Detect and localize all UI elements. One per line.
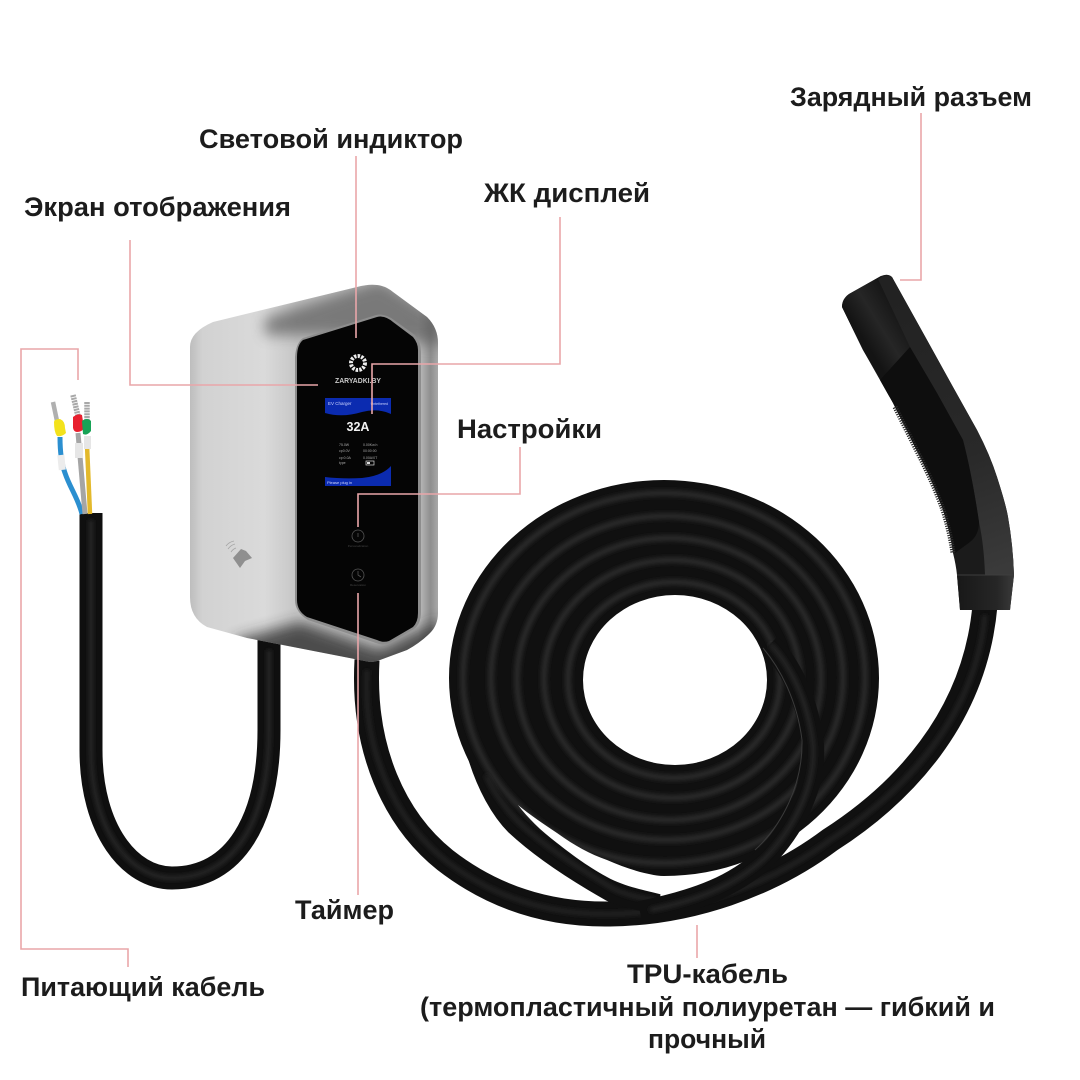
screen: 75.0W bbox=[339, 443, 350, 447]
settings button: Personalization bbox=[348, 544, 369, 548]
label: display screen: Экран отображения bbox=[24, 192, 291, 222]
nfc icon bbox=[226, 541, 252, 568]
screen: type bbox=[339, 461, 346, 465]
label: light indicator: Световой индиктор bbox=[199, 124, 463, 154]
unit body bbox=[185, 280, 445, 680]
wall unit bbox=[185, 280, 445, 680]
leader lines bbox=[21, 113, 921, 967]
screen: 0.00A/0T bbox=[363, 456, 378, 460]
label: TPU cable bbox=[420, 959, 995, 1054]
screen: Please plug in bbox=[327, 480, 352, 485]
label: LCD display: ЖК дисплей bbox=[483, 178, 650, 208]
screen: cp0.0V bbox=[339, 449, 351, 453]
screen bbox=[325, 398, 391, 486]
crossing strand bbox=[640, 644, 813, 912]
charging connector bbox=[842, 275, 1014, 610]
settings button bbox=[348, 530, 369, 548]
cable coil bbox=[449, 480, 879, 912]
label: settings: Настройки bbox=[457, 414, 602, 444]
wires bbox=[53, 395, 91, 514]
screen: cp:0.0A bbox=[339, 456, 352, 460]
label: charging connector: Зарядный разъем bbox=[790, 82, 1032, 112]
charging cable long bbox=[367, 605, 985, 914]
label: TPU cable: TPU-кабель bbox=[627, 959, 788, 989]
screen: 00:00:00 bbox=[363, 449, 377, 453]
label: TPU cable: (термопластичный полиуретан — гибкий и bbox=[420, 992, 995, 1022]
screen: EV Charger bbox=[328, 401, 352, 406]
logo: ZARYADKI.BY bbox=[335, 378, 381, 385]
front face rim bbox=[295, 315, 421, 644]
power cable bbox=[91, 513, 269, 878]
label: timer: Таймер bbox=[295, 895, 394, 925]
timer button: Reservation bbox=[350, 583, 366, 587]
front face bbox=[297, 317, 418, 642]
screen: 0.00Kw.h bbox=[363, 443, 377, 447]
logo bbox=[335, 356, 381, 385]
screen: 32A bbox=[347, 420, 369, 434]
label: power cable: Питающий кабель bbox=[21, 972, 265, 1002]
label: TPU cable: прочный bbox=[648, 1024, 766, 1054]
screen: Untethered bbox=[371, 402, 388, 406]
timer button bbox=[350, 569, 366, 587]
